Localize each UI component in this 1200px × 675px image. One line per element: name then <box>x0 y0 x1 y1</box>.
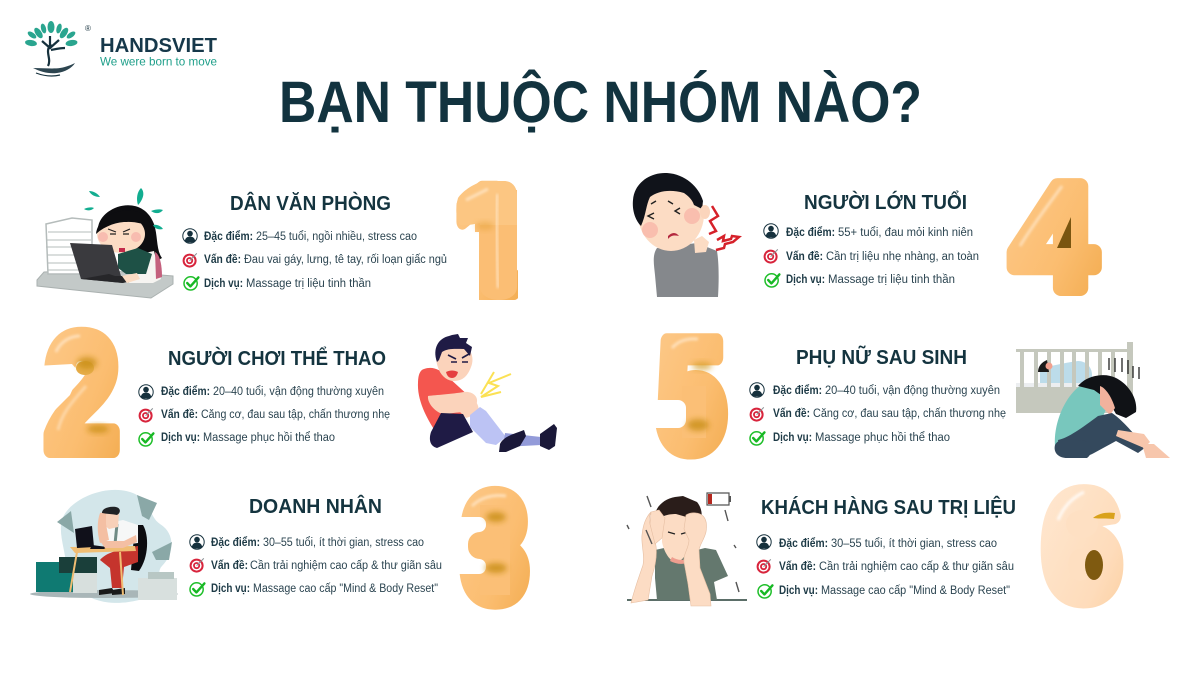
text: dịch vụ: Massage cao cấp "Mind & Body Reset" <box>253 583 438 595</box>
text: đặc điểm: 20–40 tuổi, vận động thường xuyên <box>213 386 384 398</box>
icon: check <box>184 277 198 290</box>
text: đặc điểm: Đặc điểm: <box>786 227 835 239</box>
illustration: tired mother and crib <box>1016 342 1170 458</box>
heading: DOANH NHÂN <box>249 494 382 518</box>
panel: doanh nhân <box>30 462 528 632</box>
text: đặc điểm: 30–55 tuổi, ít thời gian, stress cao <box>831 538 997 550</box>
number 6: 6 <box>1043 462 1121 632</box>
number 2: 2 <box>45 301 119 485</box>
text: dịch vụ: Massage trị liệu tinh thần <box>246 278 371 290</box>
icon: target <box>183 253 197 268</box>
icon: check <box>750 432 764 445</box>
icon: person <box>764 224 778 238</box>
icon: target <box>190 558 204 573</box>
number 5: 5 <box>658 307 725 484</box>
heading: DÂN VĂN PHÒNG <box>230 191 391 215</box>
text: vấn đề: Vấn đề: <box>211 560 248 572</box>
text: dịch vụ: Dịch vụ: <box>211 583 250 595</box>
text: dịch vụ: Dịch vụ: <box>779 585 818 597</box>
icon: target <box>139 408 153 423</box>
heading: NGƯỜI CHƠI THỂ THAO <box>168 346 386 370</box>
text: vấn đề: Cần trải nghiệm cao cấp & thư giãn sâu <box>819 561 1014 573</box>
text: dịch vụ: Massage phục hồi thể thao <box>815 432 950 444</box>
icon: person <box>757 535 771 549</box>
illustration: injured athlete <box>418 334 557 452</box>
number 1: 1 <box>455 157 517 325</box>
heading: KHÁCH HÀNG SAU TRỊ LIỆU <box>761 495 1016 519</box>
illustration: older man with shoulder pain <box>633 173 739 297</box>
text: vấn đề: Vấn đề: <box>204 254 241 266</box>
text: vấn đề: Vấn đề: <box>161 409 198 421</box>
text: đặc điểm: Đặc điểm: <box>204 231 253 243</box>
text: đặc điểm: 20–40 tuổi, vận động thường xuyên <box>825 385 1000 397</box>
text: vấn đề: Vấn đề: <box>779 561 816 573</box>
text: dịch vụ: Massage cao cấp "Mind & Body Reset" <box>821 585 1010 597</box>
text: đặc điểm: Đặc điểm: <box>773 385 822 397</box>
text: đặc điểm: Đặc điểm: <box>161 386 210 398</box>
panel: dân văn phòng <box>37 157 526 325</box>
icon: check <box>758 585 772 598</box>
icon: person <box>183 229 197 243</box>
icon: person <box>750 383 764 397</box>
icon: check <box>190 583 204 596</box>
text: vấn đề: Vấn đề: <box>773 408 810 420</box>
icon: target <box>750 407 764 422</box>
illustration: stressed businessman <box>30 490 178 603</box>
logo tagline: We were born to move <box>100 54 217 68</box>
logo registered mark: ® <box>85 24 91 33</box>
heading: PHỤ NỮ SAU SINH <box>796 345 967 369</box>
text: đặc điểm: Đặc điểm: <box>211 537 260 549</box>
logo: Handsviet <box>25 21 217 76</box>
text: dịch vụ: Massage trị liệu tinh thần <box>828 274 955 286</box>
text: đặc điểm: 25–45 tuổi, ngồi nhiều, stress cao <box>256 231 417 243</box>
number 4: 4 <box>1012 155 1095 320</box>
number 3: 3 <box>463 462 528 632</box>
icon: target <box>757 559 771 574</box>
illustration: office worker <box>37 188 173 298</box>
text: vấn đề: Cần trải nghiệm cao cấp & thư giãn sâu <box>250 560 442 572</box>
icon: check <box>139 433 153 446</box>
illustration: exhausted client <box>627 493 747 606</box>
title: BẠN THUỘC NHÓM NÀO? <box>279 70 922 135</box>
logo wordmark: HANDSVIET <box>100 34 217 57</box>
panel: người lớn tuổi <box>633 155 1095 320</box>
icon: tree and hand <box>25 21 78 76</box>
text: đặc điểm: 30–55 tuổi, ít thời gian, stress cao <box>263 537 424 549</box>
icon: check <box>765 274 779 287</box>
icon: person <box>190 535 204 549</box>
icon: person <box>139 385 153 399</box>
icon: target <box>764 249 778 264</box>
panel: khách hàng sau trị liệu <box>627 462 1121 632</box>
text: vấn đề: Căng cơ, đau sau tập, chấn thương nhẹ <box>813 408 1006 420</box>
text: vấn đề: Vấn đề: <box>786 251 823 263</box>
text: vấn đề: Cần trị liệu nhẹ nhàng, an toàn <box>826 251 979 263</box>
text: dịch vụ: Dịch vụ: <box>204 278 243 290</box>
text: vấn đề: Căng cơ, đau sau tập, chấn thương nhẹ <box>201 409 390 421</box>
text: đặc điểm: Đặc điểm: <box>779 538 828 550</box>
panel: phụ nữ sau sinh <box>648 307 1170 484</box>
text: đặc điểm: 55+ tuổi, đau mỏi kinh niên <box>838 227 973 239</box>
text: dịch vụ: Dịch vụ: <box>161 432 200 444</box>
text: dịch vụ: Dịch vụ: <box>773 432 812 444</box>
panel: người chơi thể thao <box>36 301 557 485</box>
text: vấn đề: Đau vai gáy, lưng, tê tay, rối loạn giấc ngủ <box>244 254 447 266</box>
heading: NGƯỜI LỚN TUỔI <box>804 190 967 214</box>
text: dịch vụ: Dịch vụ: <box>786 274 825 286</box>
text: dịch vụ: Massage phục hồi thể thao <box>203 432 335 444</box>
